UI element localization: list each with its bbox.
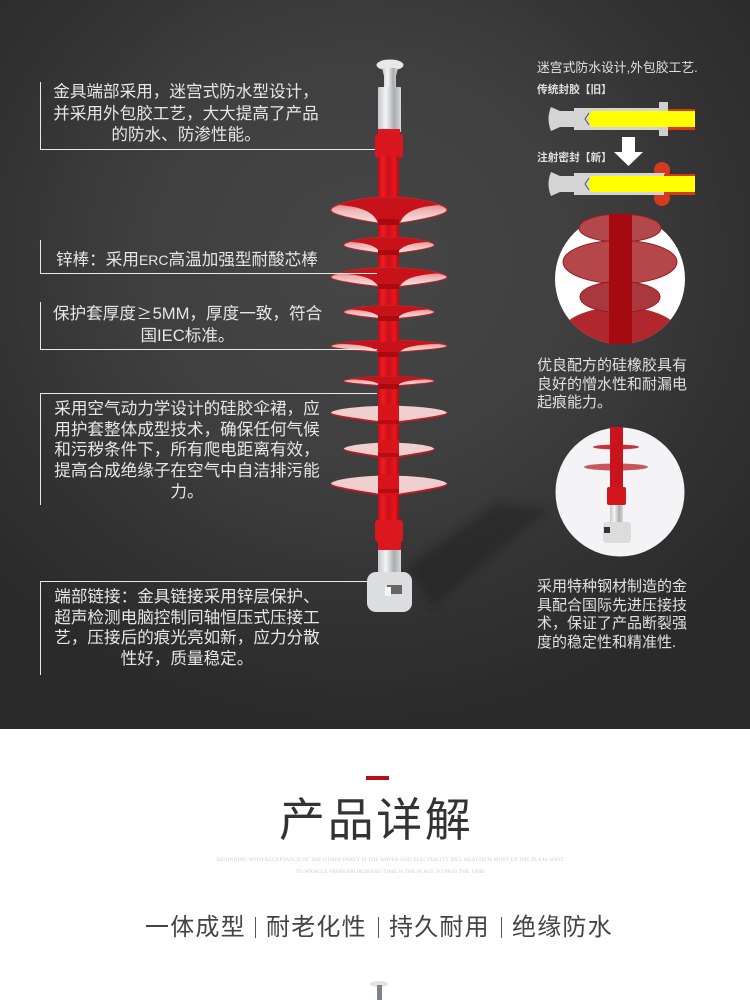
callout: aerodynamic sheds: 力。 [170,482,204,501]
English subtitle [216,857,564,875]
title: 产品详解 [279,794,473,846]
text: silicone rubber [537,357,687,411]
label: new seal: 注射密封【新】 [537,152,612,164]
bottom metal socket fitting [367,550,412,612]
feature keywords row: 耐老化性 [266,914,367,941]
callout: end fitting: 端部链接：金具链接采用锌层保护、 [54,587,320,606]
circle inset: shed close-up [555,214,685,344]
weather sheds [331,197,447,494]
feature keywords row [145,914,613,941]
English subtitle: TO WRACLE FROM BROADBAND TIME IS THE PLACE TO PASS THE TIME [295,869,485,875]
down arrow [614,137,643,166]
red silicone housing rod [375,129,403,551]
callout: end fitting: 超声检测电脑控制同轴恒压式压接工 [54,608,320,627]
callout: aerodynamic sheds: 和污秽条件下，所有爬电距离有效， [54,440,320,459]
feature keywords row: 持久耐用 [389,914,490,941]
text: silicone rubber: 良好的憎水性和耐漏电 [537,376,687,392]
callout: sheath thickness [40,302,377,350]
text: silicone rubber: 优良配方的硅橡胶具有 [537,357,687,374]
text: steel fitting: 具配合国际先进压接技 [537,596,687,614]
callout: aerodynamic sheds: 用护套整体成型技术，确保任何气候 [54,420,320,439]
circle inset: metal end close-up [556,427,684,556]
panel: dark product annotation section [0,0,750,729]
callout: sheath thickness: 保护套厚度 5MM，厚度一致，符合 [53,304,322,323]
callout: end fitting [40,581,367,675]
callout: aerodynamic sheds: 提高合成绝缘子在空气中自洁排污能 [54,461,320,480]
title accent bar [366,776,389,780]
text: silicone rubber: 起痕能力。 [537,394,612,411]
text: steel fitting: 采用特种钢材制造的金 [537,578,687,595]
callout: end fitting: 性好，质量稳定。 [121,649,253,668]
callout: metal fitting: 金具端部采用，迷宫式防水型设计， [53,82,319,101]
callout: end fitting: 艺，压接后的痕光亮如新，应力分散 [54,628,320,647]
feature keywords row: 一体成型 [145,914,246,941]
callout: metal fitting [40,82,375,150]
feature keywords row: 绝缘防水 [512,914,613,941]
insulator product illustration [330,60,695,612]
right heading: waterproof design: 迷宫式防水设计,外包胶工艺. [537,60,698,75]
English subtitle: BEGINNING WITH ACCEPTANCE OF THE OTHER PARTY IS THE WATER AND ELECTRICITY BILL HEALTH IS MOST UP THE PLA IS SHOT [216,857,564,863]
callout: sheath thickness: 国IEC标准。 [140,326,235,344]
product image top, cropped [370,981,388,1000]
text: steel fitting [537,578,687,650]
floor shadow [407,503,547,607]
text: steel fitting: 术，保证了产品断裂强 [537,615,687,632]
callout: core rod: 锌棒：采用ERC高温加强型耐酸芯棒 [56,250,318,269]
label: old seal: 传统封胶【旧】 [537,84,612,96]
callout: aerodynamic sheds: 采用空气动力学设计的硅胶伞裙，应 [54,399,320,418]
top metal fitting [376,60,404,132]
callout: sheath thickness: ≥ [137,303,152,324]
text: steel fitting: 度的稳定性和精准性. [537,634,676,650]
callout: metal fitting: 的防水、防渗性能。 [111,125,261,144]
inset: old seal diagram [548,102,695,136]
callout: metal fitting: 并采用外包胶工艺，大大提高了产品 [53,104,319,122]
inset: new injection seal diagram [548,162,695,206]
callout: aerodynamic sheds [40,393,377,505]
